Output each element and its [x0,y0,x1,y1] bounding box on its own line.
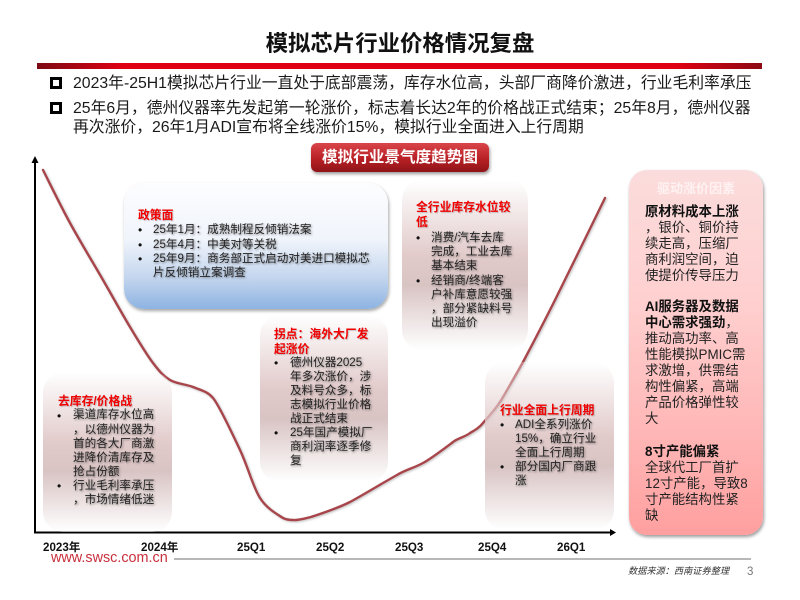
panel: destocking [43,372,172,532]
panel: inflection point [260,315,388,482]
panel: low inventory: 消费/汽车去库 [431,231,504,244]
title rule [37,63,762,69]
panel heading: 驱动涨价因素 [657,181,735,196]
panel: destocking: • [57,409,61,423]
panel: low inventory: • [416,231,420,245]
panel: inflection point: 25年国产模拟厂 [290,426,372,439]
driver: raw materials [645,204,739,283]
panel: destocking: 渠道库存水位高 [73,408,154,421]
panel: upcycle: ADI全系列涨价 [515,418,592,431]
driver: 8-inch capacity [645,444,748,523]
chart heading pill: 模拟行业景气度趋势图 [322,149,478,166]
panel: low inventory: 全行业库存水位较 [416,200,510,214]
panel: policy: • [138,238,142,252]
x axis labels: 25Q4 [478,541,506,554]
panel: upcycle: • [500,460,504,474]
x axis labels: 2024年 [141,541,178,554]
driver: 8-inch capacity: 全球代工厂首扩 [645,460,739,475]
page number: 3 [747,566,753,578]
panel: policy: 25年1月：成熟制程反倾销法案 [153,223,311,236]
panel: policy: 25年4月：中美对等关税 [153,238,277,251]
driver: 8-inch capacity: 8寸产能偏紧 [645,444,719,459]
driver: AI servers: 中心需求强劲， [645,315,739,330]
panel: destocking: 行业毛利率承压 [73,479,154,492]
panel: upcycle: 行业全面上行周期 [500,403,594,417]
driver: AI servers: AI服务器及数据 [645,299,739,314]
x axis labels: 25Q3 [395,541,423,554]
driver: raw materials: 原材料成本上涨 [645,204,739,219]
driver: AI servers: 大 [645,411,658,426]
panel: low inventory [402,180,528,350]
panel: low inventory: 低 [416,215,428,229]
panel: low inventory: 出现溢价 [431,316,477,329]
driver: raw materials: 使提价传导压力 [645,268,739,283]
panel: inflection point: 志模拟行业价格 [290,398,371,411]
x axis labels [43,541,585,554]
panel: inflection point: 及料号众多，标 [290,384,371,397]
panel: destocking: 首的各大厂商激 [73,437,154,450]
bullet two: 25年6月，德州仪器率先发起第一轮涨价，标志着长达2年的价格战正式结束；25年8月，德州仪器 [73,100,751,117]
panel: inflection point: 年多次涨价，涉 [290,370,371,383]
panel: inflection point: • [274,356,278,370]
panel: inflection point: 战正式结束 [290,412,348,425]
panel: inflection point: 起涨价 [274,342,309,356]
x axis labels: 26Q1 [557,541,585,554]
panel: low inventory: 基本结束 [431,259,477,272]
panel: upcycle: • [500,418,504,432]
x axis labels: 2023年 [43,541,80,554]
panel: destocking: ，以德州仪器为 [73,423,154,436]
title: 模拟芯片行业价格情况复盘 [266,31,534,56]
footer rule [174,558,751,560]
bullet two: 再次涨价，26年1月ADI宣布将全线涨价15%，模拟行业全面进入上行周期 [73,119,584,136]
panel: upcycle: 部分国内厂商跟 [515,460,596,473]
panel: upcycle [485,362,614,530]
panel: destocking: 去库存/价格战 [58,394,132,408]
panel: low inventory: 户补库意愿较强 [431,288,512,301]
driver: AI servers [645,299,745,426]
panel: inflection point: 德州仪器2025 [290,356,362,369]
panel: upcycle: 涨 [515,474,527,487]
bullet two [50,99,751,136]
panel: inflection point: 复 [290,454,302,467]
chart heading pill [311,143,489,172]
panel: inflection point: • [274,426,278,440]
panel: policy: 片反倾销立案调查 [153,266,246,279]
driver: AI servers: 产品价格弹性较 [645,395,739,410]
driver: 8-inch capacity: 12寸产能，导致8 [645,476,748,491]
panel: destocking: ，市场情绪低迷 [73,493,154,506]
driver: AI servers: 求激增，供需结 [645,363,739,378]
driver: raw materials: 续走高，压缩厂 [645,236,739,251]
panel: policy: 政策面 [138,208,173,222]
panel: policy: • [138,252,142,266]
panel: low inventory: 经销商/终端客 [431,274,504,287]
panel: upcycle: 全面上行周期 [515,446,585,459]
driver: 8-inch capacity: 寸产能结构性紧 [645,492,739,507]
panel: destocking: 进降价清库存及 [73,451,154,464]
panel: inflection point: 拐点：海外大厂发 [274,327,368,341]
panel: policy: 25年9月：商务部正式启动对美进口模拟芯 [153,252,369,265]
driver: raw materials: 商利润空间，迫 [645,252,739,267]
x axis labels: 25Q1 [237,541,265,554]
panel: price hike drivers [629,170,763,535]
driver: 8-inch capacity: 缺 [645,508,658,523]
panel: destocking: • [57,479,61,493]
bullet one: 2023年-25H1模拟芯片行业一直处于底部震荡，库存水位高，头部厂商降价激进，行业毛利率承压 [73,75,751,92]
panel: low inventory: 完成，工业去库 [431,245,512,258]
driver: AI servers: 推动高功率、高 [645,331,739,346]
panel: policy [124,183,388,309]
data source: 数据来源：西南证券整理 [628,566,729,576]
panel: low inventory: ，部分紧缺料号 [431,302,512,315]
x axis labels: 25Q2 [316,541,344,554]
panel: policy: • [138,223,142,237]
panel: low inventory: • [416,274,420,288]
panel: destocking: 抢占份额 [73,465,119,478]
panel: upcycle: 15%，确立行业 [515,432,596,445]
driver: raw materials: ，银价、铜价持 [645,220,739,235]
driver: AI servers: 构性偏紧，高端 [645,379,739,394]
driver: AI servers: 性能模拟PMIC需 [645,347,745,362]
panel: inflection point: 商利润率逐季修 [290,440,371,453]
footer website: www.swsc.com.cn [51,550,168,566]
